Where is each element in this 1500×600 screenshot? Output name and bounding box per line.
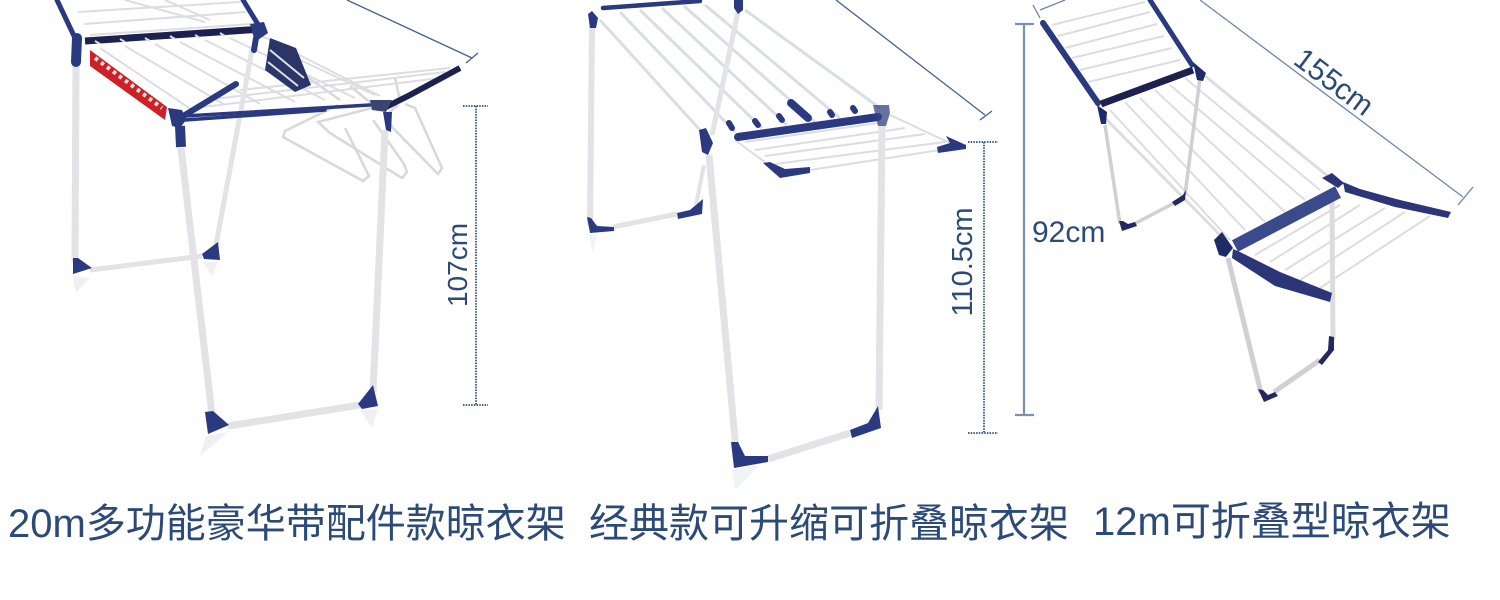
rack 3 legs [1105,78,1333,393]
rack 2 feet [587,199,881,468]
dimension: rack 3 height 92cm [1015,24,1105,415]
rack 1 front frame [168,68,460,147]
dimension: rack 2 height 110.5cm [947,142,998,433]
rack 2 long wires [600,5,880,132]
rack 1 reflections [73,262,378,456]
dimension: rack 1 height 107cm: 107cm [442,223,473,307]
caption: rack 3: 12m可折叠型晾衣架 [1093,500,1451,544]
rack 2 frame [588,0,890,155]
dimension: rack 2 length [836,0,992,120]
rack 3 upper frame [1043,0,1206,124]
dimension: rack 3 length 155cm [1033,0,1473,205]
rack 1 feet [73,242,378,434]
rack 2 front shelf wires [735,115,950,170]
drying rack 2: classic extendable [587,0,966,490]
rack 2 shelf corners [763,136,966,178]
rack 1 wires [78,0,450,112]
caption: rack 2: 经典款可升缩可折叠晾衣架 [589,502,1069,546]
dimension: rack 2 height 110.5cm: 110.5cm [947,207,979,317]
dimension: rack 1 height 107cm [442,106,488,405]
drying rack 1: 20m deluxe with accessories [57,0,460,456]
rack 3 feet [1119,190,1334,402]
rack 1 legs [75,50,385,426]
dimension: rack 3 length 155cm: 155cm [1288,42,1380,123]
rack 3 wires [1052,2,1430,288]
dimension: rack 3 height 92cm: 92cm [1032,216,1105,249]
rack 1 hangers [283,72,442,181]
rack 2 reflections [589,235,760,490]
rack 1 upper frame [57,0,268,62]
rack 3 lower frame [1214,173,1451,302]
dimension: rack 1 length [347,0,478,63]
drying rack 3: 12m folding [1043,0,1451,402]
rack 1 red accessory bar [90,50,167,120]
caption: rack 1: 20m多功能豪华带配件款晾衣架 [8,502,566,546]
rack 2 legs [590,12,882,459]
rack 1 navy accessory holder [265,38,311,92]
